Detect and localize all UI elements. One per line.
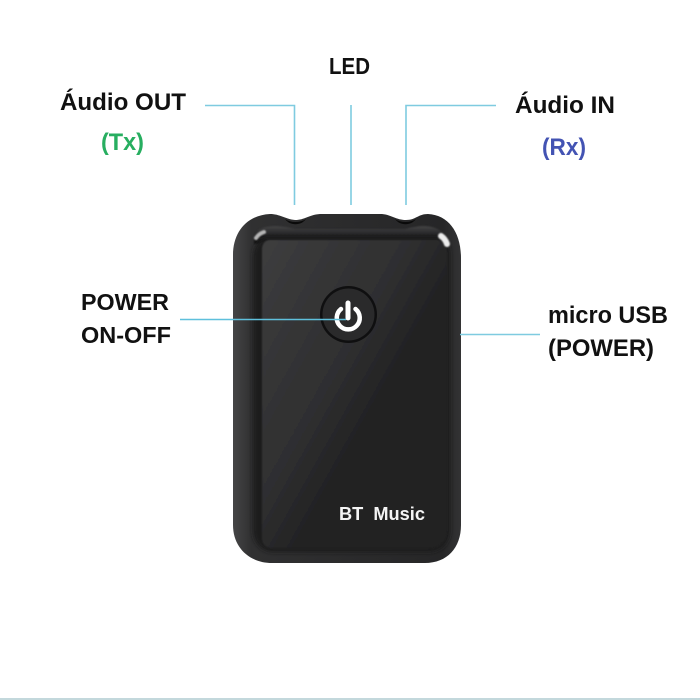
corner highlight left (256, 232, 264, 238)
top shoulder band (254, 226, 449, 244)
leader line: Audio OUT (205, 106, 294, 205)
front face (253, 238, 450, 552)
leader line: micro USB (460, 334, 540, 336)
power button (320, 286, 377, 343)
brand text: BT Music (339, 504, 425, 524)
power icon (337, 303, 360, 329)
label: (POWER): (POWER) (548, 335, 654, 362)
leader line: LED (350, 105, 352, 205)
corner highlight right (441, 236, 447, 244)
label: Audio IN: Áudio IN (515, 91, 615, 119)
label: Audio OUT: Áudio OUT (60, 88, 186, 116)
leader line: Audio IN (406, 106, 496, 205)
device: Bluetooth adapter (233, 214, 461, 563)
bottom edge strip (0, 698, 700, 700)
audio jack left (285, 219, 306, 224)
label: LED: LED (329, 53, 370, 79)
label: POWER: POWER (81, 289, 169, 315)
label: ON-OFF: ON-OFF (81, 322, 171, 348)
device outer shell (233, 214, 461, 563)
leader line: POWER ON-OFF (180, 318, 346, 320)
label: Tx: (Tx) (101, 129, 144, 156)
label: Rx: (Rx) (542, 134, 586, 161)
audio jack right (395, 219, 416, 224)
label: micro USB: micro USB (548, 302, 668, 329)
